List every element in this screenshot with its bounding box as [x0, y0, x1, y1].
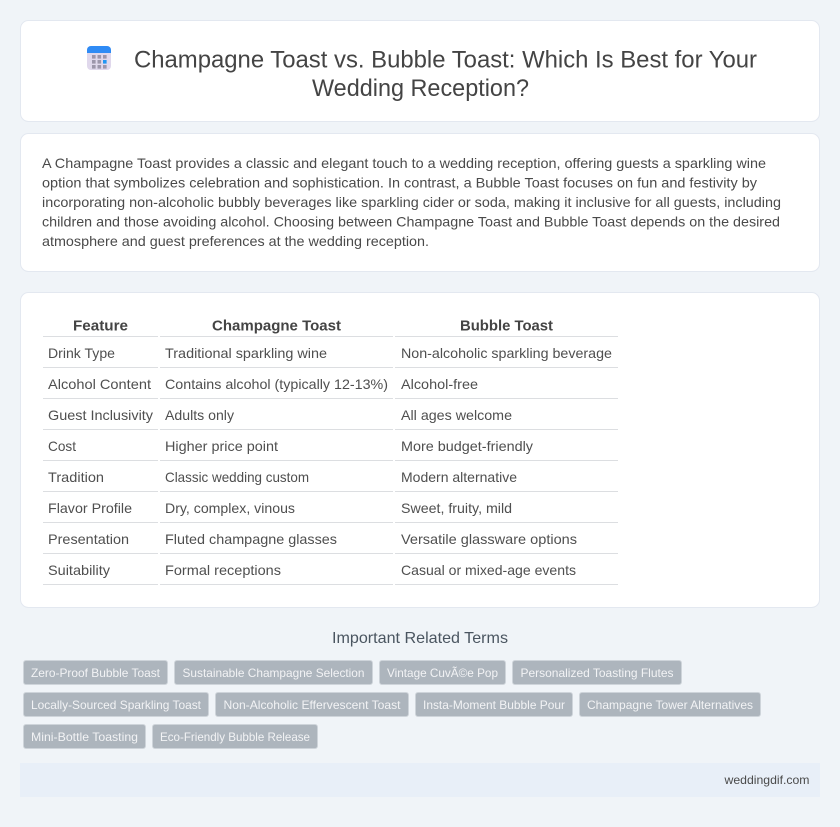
table row: presentation: Presentation	[48, 531, 129, 547]
tag	[174, 660, 372, 684]
tag: Champagne Tower Alternatives	[587, 698, 753, 712]
tag	[24, 692, 208, 716]
table row: presentation: Fluted champagne glasses	[165, 531, 337, 547]
tag: Vintage CuvÃ©e Pop	[387, 666, 498, 680]
table row: suitability: Suitability	[48, 562, 110, 578]
table row: drink type: Traditional sparkling wine	[165, 345, 327, 361]
tag	[416, 692, 572, 716]
tag: Mini-Bottle Toasting	[31, 730, 138, 744]
table row: tradition: Classic wedding custom	[165, 469, 309, 485]
tag: Zero-Proof Bubble Toast	[31, 666, 161, 680]
table row: tradition: Modern alternative	[401, 469, 517, 485]
title: Champagne Toast vs. Bubble Toast: Which Is Best for Your	[134, 46, 757, 74]
tag: Sustainable Champagne Selection	[182, 666, 364, 680]
text block: introduction paragraph: A Champagne Toast provides a classic and elegant touch to a wedding reception, offering guests a sparkling wine	[42, 155, 766, 171]
table row: flavor profile	[48, 500, 512, 516]
table row: presentation: Versatile glassware options	[401, 531, 577, 547]
table row: suitability: Casual or mixed-age events	[401, 562, 576, 578]
table row: guest inclusivity	[48, 407, 512, 423]
panel: comparison table	[20, 292, 820, 608]
table header: Feature	[73, 318, 128, 334]
table row: cost: Higher price point	[165, 438, 278, 454]
tag: Personalized Toasting Flutes	[520, 666, 674, 680]
text block: introduction paragraph: children and those avoiding alcohol. Choosing between Champagne Toast and Bubble Toast depends on the desired	[42, 214, 780, 230]
text block: introduction paragraph: atmosphere and guest preferences at the wedding reception.	[42, 233, 429, 249]
tag	[24, 660, 168, 684]
panel: introduction	[20, 134, 820, 272]
table row: cost	[48, 438, 533, 454]
tag	[380, 660, 506, 684]
table row: flavor profile: Dry, complex, vinous	[165, 500, 295, 516]
table row: alcohol content: Alcohol-free	[401, 376, 478, 392]
tag: Insta-Moment Bubble Pour	[423, 698, 565, 712]
related term tags	[24, 660, 760, 748]
table row: presentation	[48, 531, 577, 547]
table row: flavor profile: Sweet, fruity, mild	[401, 500, 512, 516]
table header: Champagne Toast	[212, 318, 341, 334]
tag	[512, 660, 682, 684]
table row: flavor profile: Flavor Profile	[48, 500, 132, 516]
tag: Locally-Sourced Sparkling Toast	[31, 698, 202, 712]
table row: drink type: Drink Type	[48, 345, 115, 361]
table row: guest inclusivity: Adults only	[165, 407, 234, 423]
footer	[20, 763, 820, 797]
panel: header	[20, 20, 820, 122]
table row: tradition	[48, 469, 517, 485]
heading: important related terms: Important Related Terms	[332, 630, 508, 647]
footer site name: weddingdif.com	[723, 773, 810, 787]
title: Wedding Reception?	[312, 75, 529, 102]
text block: introduction paragraph: incorporating non-alcoholic bubbly beverages like sparkling cider or soda, making it inclusive for all guests, including	[42, 194, 781, 210]
tag	[216, 692, 408, 716]
tag: Eco-Friendly Bubble Release	[160, 730, 310, 744]
table row: drink type	[48, 345, 612, 361]
tag	[24, 724, 146, 748]
table row: guest inclusivity: All ages welcome	[401, 407, 512, 423]
table row: cost: More budget-friendly	[401, 438, 533, 454]
table row: alcohol content: Contains alcohol (typically 12-13%)	[165, 376, 388, 392]
table row: suitability	[48, 562, 576, 578]
table row: drink type: Non-alcoholic sparkling beverage	[401, 345, 612, 361]
tag: Non-Alcoholic Effervescent Toast	[224, 698, 401, 712]
table row: alcohol content: Alcohol Content	[48, 376, 151, 392]
table header: Bubble Toast	[460, 318, 553, 334]
icon: calendar	[87, 46, 111, 70]
table row: guest inclusivity: Guest Inclusivity	[48, 407, 153, 423]
text block: introduction paragraph: option that symbolizes celebration and sophistication. In contrast, a Bubble Toast focuses on fun and festivity by	[42, 174, 757, 190]
tag	[580, 692, 760, 716]
table header	[73, 318, 553, 334]
tag	[152, 724, 318, 748]
table row: suitability: Formal receptions	[165, 562, 281, 578]
table row: cost: Cost	[48, 438, 76, 454]
table row: tradition: Tradition	[48, 469, 104, 485]
table row: alcohol content	[48, 376, 478, 392]
